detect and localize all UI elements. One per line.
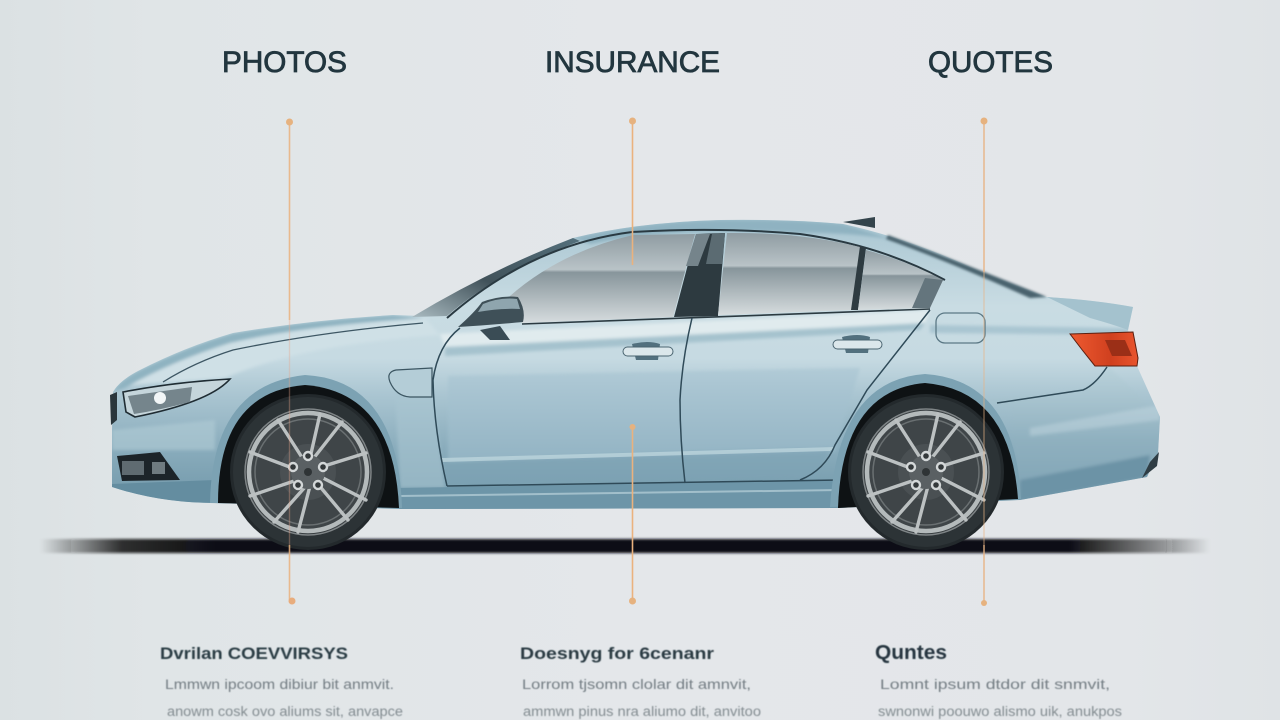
windshield [412,238,580,317]
roof rail line [447,230,945,318]
callout line: insurance [629,118,636,604]
roof antenna [843,217,875,228]
callout line: quotes [980,118,988,606]
front grille edge [110,392,117,425]
text block: right [875,642,1122,719]
rear side window [718,233,860,315]
text block: right: Quntes [875,642,947,664]
rear wheel [848,394,1004,550]
body shading [112,220,1160,510]
front side window [510,234,695,323]
callout line: photos [286,118,296,604]
quarter window [858,250,943,310]
mirror [458,297,524,340]
text block: left: anowm cosk ovo aliums sit, anvapce [167,704,403,719]
car body [112,220,1160,509]
text block: left: Lmmwn ipcoom dibiur bit anmvit. [165,676,394,692]
text block: center [520,644,761,719]
hood crease [163,323,423,382]
text block: left [160,644,403,719]
rear wheel arch [830,374,1021,507]
text block: center: Doesnyg for 6cenanr [520,644,714,663]
rear window strip [886,235,1047,298]
heading: INSURANCE: INSURANCE [545,46,720,79]
side vent [389,368,432,397]
belt line [522,309,930,324]
rear exhaust [1142,452,1159,478]
door handle: front [623,342,673,360]
front wheel arch [210,375,402,508]
car illustration [110,217,1160,550]
fog light [117,452,180,481]
fuel door [936,313,985,343]
ground shadow [40,539,1210,553]
text block: center: ammwn pinus nra aliumo dit, anvitoo [523,704,761,719]
taillight [1070,332,1138,366]
quarter pillar [851,246,866,310]
front wheel [230,394,386,550]
text block: center: Lorrom tjsomn clolar dit amnvit, [522,676,751,692]
text block: right: swnonwi poouwo alismo uik, anukpos [878,704,1122,719]
heading: QUOTES: QUOTES [928,46,1053,79]
headlight [123,379,230,417]
B pillar [674,233,725,317]
door lines [433,310,1107,486]
trunk lip [1047,297,1133,330]
text block: right: Lomnt ipsum dtdor dit snmvit, [880,676,1110,692]
door handle: rear [833,335,882,353]
heading: PHOTOS: PHOTOS [222,46,347,79]
text block: left: Dvrilan COEVVIRSYS [160,644,348,663]
